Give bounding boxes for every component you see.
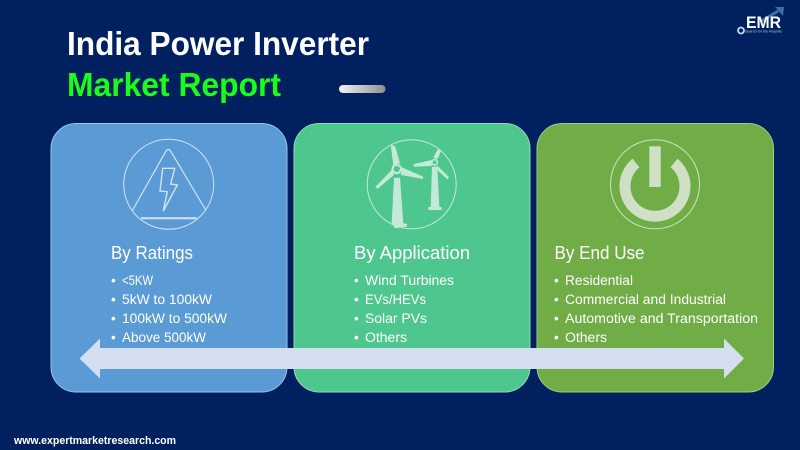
list: ratings: •: [111, 311, 116, 326]
list: ratings: •: [111, 292, 116, 307]
title: India Power Inverter: [67, 25, 369, 62]
heading: By End Use: By End Use: [554, 242, 644, 263]
list: end uses: Commercial and Industrial: [565, 292, 726, 307]
panel: By Application: [294, 124, 530, 392]
logo: EMR: EMR: [746, 13, 781, 32]
title: Market Report: [67, 66, 281, 103]
list: ratings: <5KW: [122, 273, 153, 288]
list: ratings: •: [111, 273, 116, 288]
list: end uses: Automotive and Transportation: [565, 311, 758, 326]
list: end uses: •: [554, 292, 559, 307]
list: end uses: •: [554, 311, 559, 326]
list: ratings: •: [111, 330, 116, 345]
title: [67, 25, 369, 103]
icon: electrical warning triangle: [124, 139, 214, 229]
list: ratings: 5kW to 100kW: [122, 292, 212, 307]
logo: EMR: Search for the Reports: [745, 30, 782, 34]
list: applications: •: [354, 273, 359, 288]
logo: EMR: [738, 7, 784, 34]
arrow: double-headed horizontal: [80, 338, 744, 378]
heading: By Application: By Application: [354, 242, 470, 263]
panel: By Ratings: [51, 124, 287, 392]
list: applications: •: [354, 311, 359, 326]
list: end uses: Others: [565, 330, 607, 345]
list: applications: Solar PVs: [365, 311, 427, 326]
heading: By Ratings: By Ratings: [111, 242, 193, 263]
list: applications: •: [354, 292, 359, 307]
list: applications: [354, 273, 454, 345]
list: ratings: [111, 273, 227, 345]
list: ratings: 100kW to 500kW: [122, 311, 227, 326]
icon: wind turbines: [367, 140, 456, 229]
list: applications: Others: [365, 330, 407, 345]
list: end uses: [554, 273, 758, 345]
icon: power symbol: [610, 140, 700, 229]
list: end uses: •: [554, 330, 559, 345]
list: applications: Wind Turbines: [365, 273, 454, 288]
panel: By End Use: [537, 124, 774, 392]
list: ratings: Above 500kW: [122, 330, 206, 345]
list: applications: EVs/HEVs: [365, 292, 426, 307]
list: applications: •: [354, 330, 359, 345]
list: end uses: Residential: [565, 273, 633, 288]
list: end uses: •: [554, 273, 559, 288]
footer website: www.expertmarketresearch.com: [13, 435, 176, 447]
decorative pill accent: [339, 85, 386, 93]
